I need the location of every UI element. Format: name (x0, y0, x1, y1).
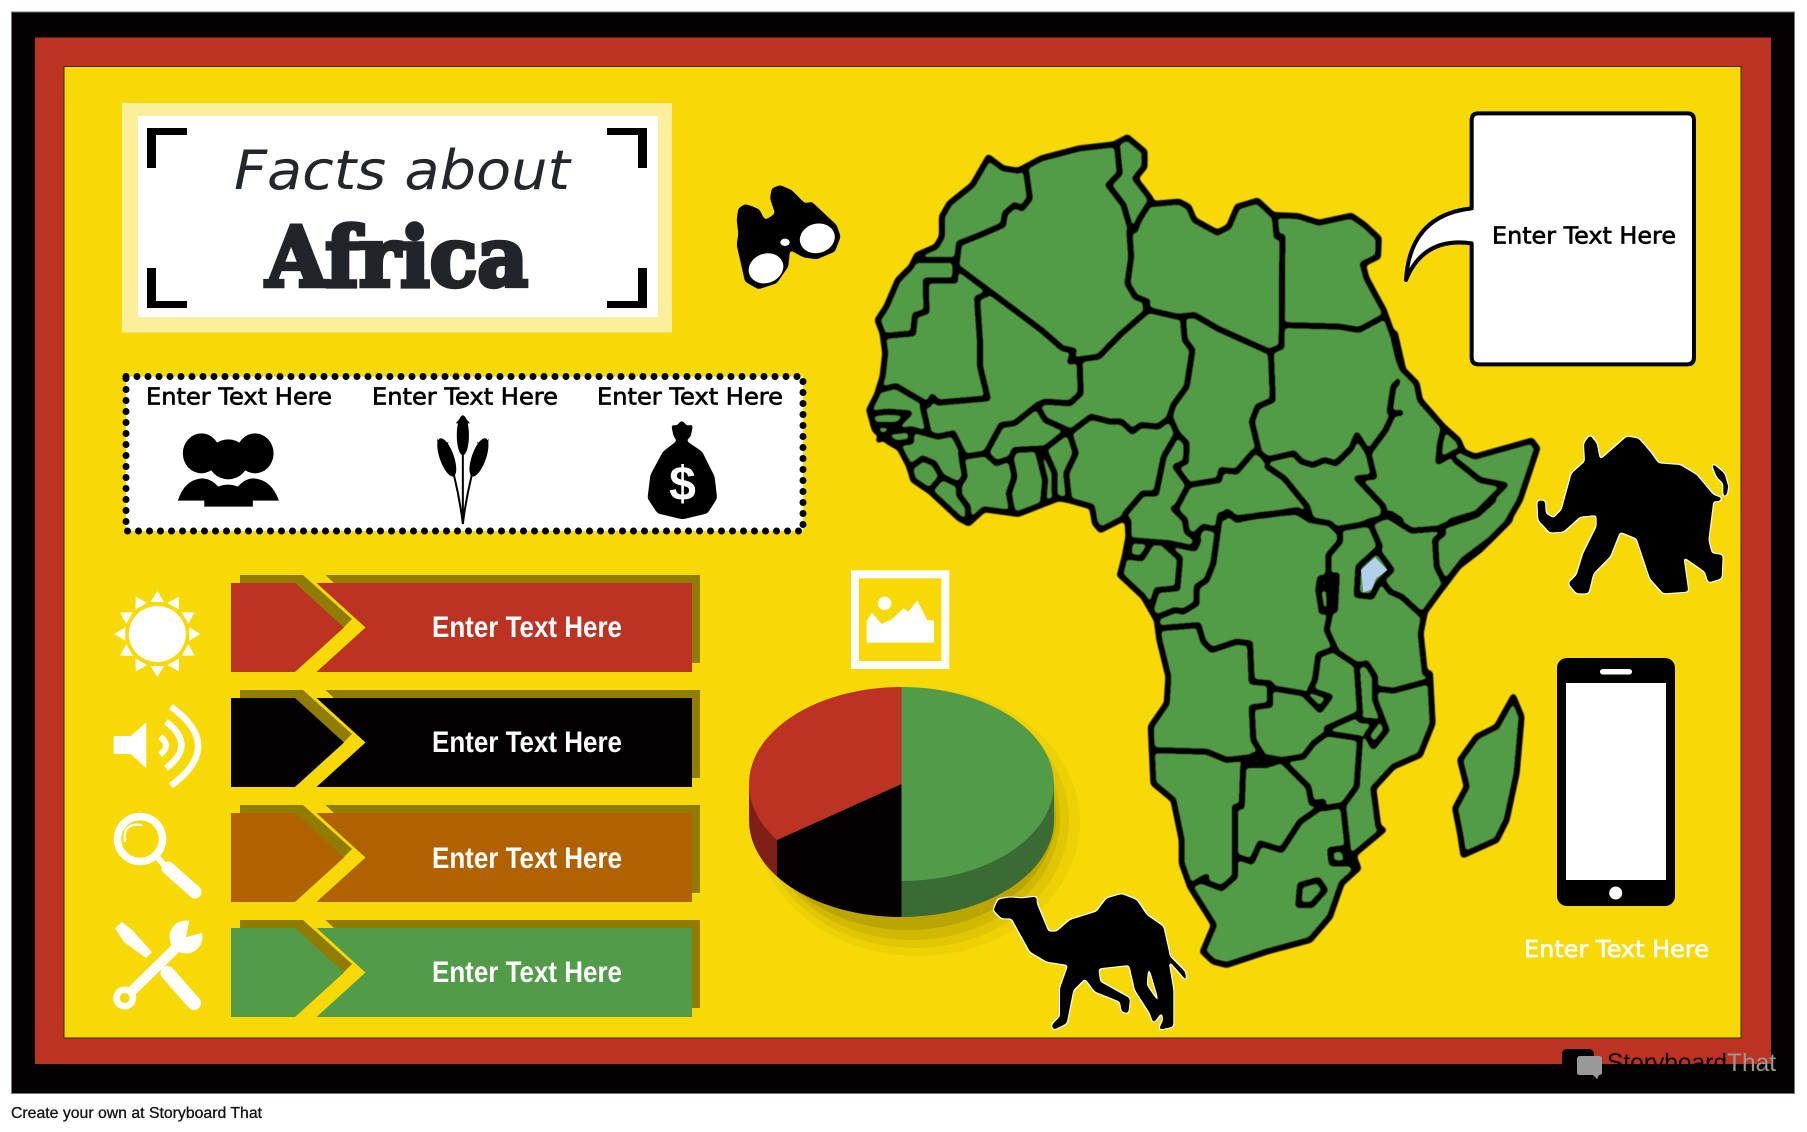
banner text: Enter Text Here (432, 611, 622, 644)
map: southern Africa (1120, 500, 1522, 965)
icon: tools (113, 917, 206, 1010)
callout text: Enter Text Here (1492, 222, 1676, 250)
icon: people (178, 433, 279, 507)
icon: money bag: $ (669, 458, 696, 511)
lake Victoria (1361, 557, 1387, 592)
banner 2: black (231, 690, 700, 787)
banner 1: red (231, 575, 700, 672)
watermark logo (1562, 1049, 1776, 1079)
heading: Facts about: Facts about (234, 139, 572, 202)
map: horn of Africa (1390, 333, 1537, 610)
banner text: Enter Text Here (432, 956, 622, 989)
watermark logo: Storyboard (1607, 1049, 1727, 1077)
label: fact 1: Enter Text Here (146, 382, 332, 410)
icon: money bag (647, 420, 717, 519)
map: north coast and borders (869, 137, 1424, 575)
banner 4: green (231, 920, 700, 1017)
icon: magnifier (118, 816, 195, 892)
icon: binoculars (737, 185, 841, 289)
pie chart (749, 687, 1080, 956)
icon: wheat (433, 415, 492, 524)
icon: picture placeholder (855, 574, 945, 665)
map: Madagascar (1455, 697, 1522, 855)
panel: three facts with icons (126, 376, 803, 531)
heading: Africa: Africa (265, 210, 528, 306)
banner text: Enter Text Here (432, 842, 622, 875)
map of Africa (869, 137, 1537, 965)
banner 3: brown (231, 805, 700, 902)
speech bubble callout (1406, 113, 1694, 364)
title panel (122, 103, 672, 332)
footer credit: Create your own at Storyboard That (11, 1105, 263, 1122)
banner text: Enter Text Here (432, 726, 622, 759)
icon: sun (114, 591, 200, 677)
icon: speaker (114, 707, 198, 786)
phone caption: Enter Text Here (1524, 935, 1709, 963)
watermark logo: That (1727, 1049, 1776, 1077)
label: fact 3: Enter Text Here (597, 382, 783, 410)
icon: smartphone (1557, 658, 1675, 906)
label: fact 2: Enter Text Here (372, 382, 558, 410)
icon: elephant (1537, 435, 1728, 593)
icon: camel (993, 894, 1187, 1030)
